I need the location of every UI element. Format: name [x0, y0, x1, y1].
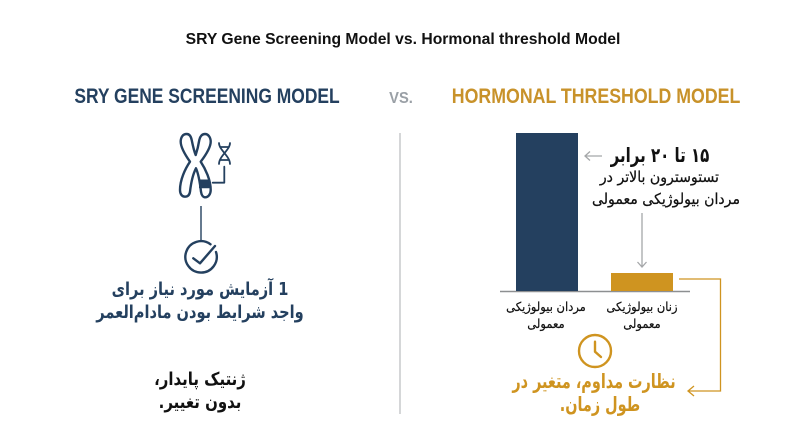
- bar label: men: [506, 299, 586, 332]
- text: one test required: واجد شرایط بودن مادام‌العمر: [96, 302, 304, 323]
- bar label: women: زنان بیولوژیکی: [606, 299, 678, 314]
- bar label: men: مردان بیولوژیکی: [506, 299, 586, 314]
- title: SRY Gene Screening Model vs. Hormonal threshold Model: [186, 31, 620, 48]
- heading: hormonal threshold model: HORMONAL THRESHOLD MODEL: [452, 85, 740, 108]
- arrow: bracket to monitoring text: [679, 279, 720, 396]
- icon: clock: [579, 335, 611, 367]
- text: stable genetics: ژنتیک پایدار،: [154, 369, 246, 390]
- text: one test required: [96, 278, 304, 323]
- callout description: مردان بیولوژیکی معمولی: [592, 190, 740, 208]
- center divider: [399, 133, 401, 414]
- callout description: تستوسترون بالاتر در: [600, 168, 719, 186]
- text: stable genetics: بدون تغییر.: [159, 392, 241, 413]
- bar label: women: [606, 299, 678, 332]
- arrow: to tall bar: [585, 152, 602, 160]
- icon: chromosome with DNA: [180, 134, 230, 197]
- text: continuous monitoring: نظارت مداوم، متغیر در: [512, 369, 676, 393]
- icon: check circle: [185, 241, 217, 273]
- bar chart: [500, 133, 690, 292]
- bar label: men: معمولی: [527, 316, 565, 331]
- text: continuous monitoring: [512, 369, 676, 416]
- callout description: [592, 168, 740, 208]
- text: stable genetics: [154, 369, 246, 413]
- text: continuous monitoring: طول زمان.: [560, 392, 640, 416]
- vs label: VS.: [389, 90, 413, 107]
- multiplier callout: ۱۵ تا ۲۰ برابر: [611, 143, 709, 167]
- text: one test required: 1 آزمایش مورد نیاز برای: [112, 279, 288, 300]
- connector line: chromosome to check: [200, 206, 202, 241]
- arrow: to short bar: [638, 213, 646, 267]
- bar label: women: معمولی: [623, 316, 661, 331]
- heading: SRY gene screening model: SRY GENE SCREENING MODEL: [74, 85, 339, 108]
